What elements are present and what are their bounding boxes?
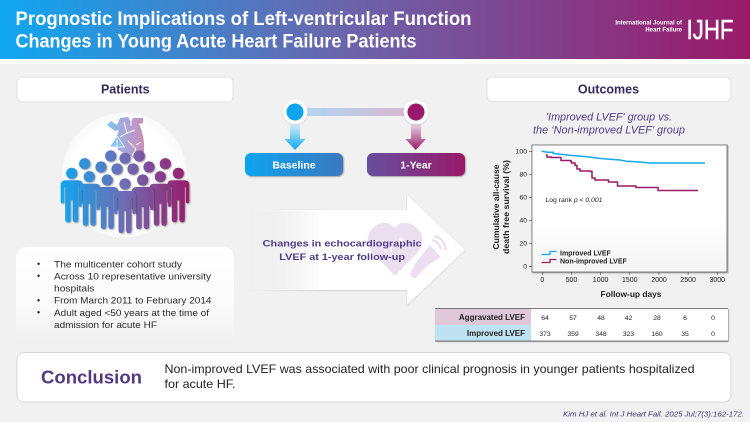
at-risk table: 28 (653, 315, 661, 322)
at-risk table: Improved LVEF (467, 329, 525, 338)
at-risk table: 64 (541, 315, 549, 322)
title: Changes in Young Acute Heart Failure Patients (16, 32, 416, 52)
header banner (0, 0, 750, 64)
logo: IJHF (615, 14, 734, 45)
text block: study details: admission for acute HF (54, 320, 158, 330)
y axis title: death free survival (%) (501, 160, 511, 254)
text block: study details: • (37, 259, 40, 269)
y axis labels (516, 149, 527, 271)
at-risk table: 348 (595, 331, 607, 338)
text block: study details: hospitals (54, 284, 95, 294)
heading: outcomes: Outcomes (578, 83, 639, 97)
text block: study details: • (37, 295, 40, 305)
x axis labels (540, 277, 725, 284)
heading: patients (17, 77, 233, 102)
heading: conclusion: Conclusion (41, 368, 142, 388)
y axis labels: 40 (519, 218, 527, 225)
title (16, 9, 472, 52)
at-risk table: 0 (711, 331, 715, 338)
logo: IJHF: Heart Failure (645, 28, 683, 34)
at-risk table: 359 (567, 331, 579, 338)
text: conclusion statement (164, 363, 694, 391)
icon: heart and ultrasound probe (368, 223, 446, 279)
panel: patients (16, 77, 234, 340)
text block: study details: Across 10 representative university (54, 271, 212, 281)
icon: baseline node and arrow (282, 100, 308, 150)
y axis title (491, 160, 511, 254)
baseline pill (245, 153, 343, 176)
at-risk table: 42 (625, 315, 632, 322)
x axis labels: 500 (566, 277, 577, 284)
y axis labels: 100 (516, 149, 527, 156)
text: changes in echocardiographic LVEF: LVEF at 1-year follow-up (279, 252, 405, 263)
at-risk table: 57 (569, 315, 577, 322)
1-year pill (367, 153, 465, 176)
logo: IJHF: International Journal of (615, 20, 683, 26)
heading: patients: Patients (101, 83, 150, 97)
panel: timeline (245, 100, 465, 305)
text block: study details: Adult aged <50 years at the time of (54, 308, 210, 318)
x axis labels: 2000 (651, 277, 667, 284)
text block: study details: From March 2011 to February 2014 (54, 296, 212, 306)
x axis labels: 0 (540, 277, 544, 284)
chart subtitle (533, 112, 685, 136)
at-risk table: Aggravated LVEF (459, 313, 525, 322)
icon: heart (107, 117, 144, 158)
y axis labels: 60 (519, 195, 527, 202)
text block: study details (16, 247, 234, 340)
1-year pill: 1-Year (400, 160, 432, 172)
survival chart (491, 145, 727, 299)
text block: study details: The multicenter cohort study (54, 259, 183, 269)
logo: IJHF: IJHF (686, 14, 734, 45)
legend: Improved LVEF (560, 251, 612, 258)
text block: study details: • (37, 308, 40, 318)
at-risk table: 35 (681, 331, 689, 338)
baseline pill: Baseline (272, 160, 316, 172)
icon: 1-year node and arrow (404, 100, 428, 150)
citation: Kim HJ et al. Int J Heart Fail. 2025 Jul;7(3):162-172. (563, 412, 744, 418)
panel: outcomes (435, 77, 731, 341)
axis ticks (529, 151, 717, 275)
legend (542, 251, 627, 266)
at-risk table: 6 (683, 315, 687, 322)
y axis title: Cumulative all-cause (491, 164, 501, 250)
x axis title: Follow-up days (601, 289, 662, 299)
chart subtitle: the ‘Non-improved LVEF' group (533, 124, 685, 136)
text: conclusion statement: for acute HF. (164, 378, 236, 391)
y axis labels: 80 (519, 172, 527, 179)
people row (61, 168, 189, 233)
at-risk table: 48 (597, 315, 605, 322)
panel: conclusion (17, 352, 731, 402)
x axis labels: 2500 (680, 277, 696, 284)
connector line (300, 108, 412, 116)
at-risk table: 0 (711, 315, 715, 322)
legend: Non-improved LVEF (560, 259, 627, 266)
annotation: log rank: Log rank p < 0.001 (546, 197, 603, 204)
x axis labels: 1500 (622, 277, 638, 284)
chart subtitle: 'Improved LVEF' group vs. (546, 112, 672, 124)
y axis labels: 20 (519, 241, 527, 248)
heading: outcomes (487, 77, 731, 102)
text block: study details: • (37, 271, 40, 281)
y axis labels: 0 (523, 264, 527, 271)
at-risk table: 160 (651, 331, 663, 338)
curve: non-improved LVEF (546, 155, 698, 190)
x axis labels: 1000 (593, 277, 608, 284)
x axis labels: 3000 (710, 277, 725, 284)
text: changes in echocardiographic LVEF (263, 238, 422, 263)
text: changes in echocardiographic LVEF: Changes in echocardiographic (263, 238, 422, 250)
at-risk table (435, 308, 728, 341)
at-risk table: 373 (539, 331, 551, 338)
at-risk table: 323 (623, 331, 634, 338)
curve: improved LVEF (542, 151, 705, 163)
back rows of heads (79, 150, 171, 175)
text: conclusion statement: Non-improved LVEF was associated with poor clinical prognosis in younger patients hospitalized (164, 363, 694, 376)
title: Prognostic Implications of Left-ventricular Function (16, 9, 472, 30)
arrow: changes in LVEF (247, 195, 465, 305)
icon: crowd of patients with heart (61, 112, 189, 238)
